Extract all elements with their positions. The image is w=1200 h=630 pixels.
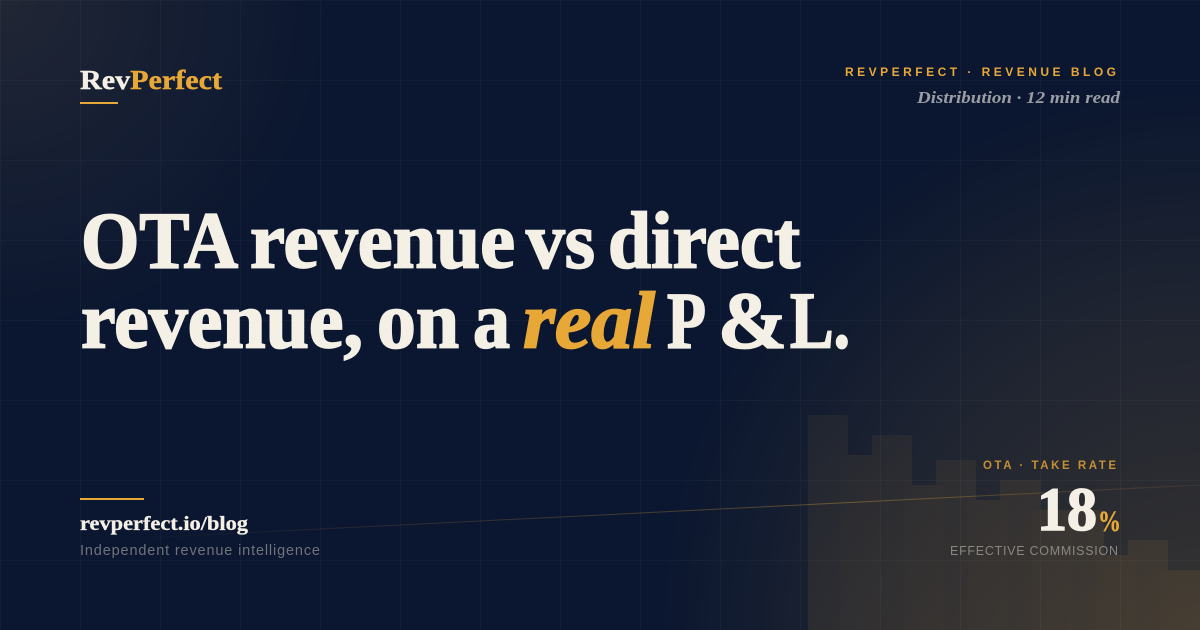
title: P <box>667 278 706 366</box>
stat value: 18 <box>1037 477 1097 544</box>
title: revenue <box>250 198 515 286</box>
stat callout <box>950 460 1121 558</box>
logo wordmark: RevPerfect <box>80 64 223 95</box>
header meta <box>845 65 1121 107</box>
bar chart: decorative revenue bars <box>808 415 1200 630</box>
category and read time: Distribution · 12 min read <box>916 88 1121 107</box>
site url: revperfect.io/blog <box>80 513 248 535</box>
title: & <box>718 278 787 366</box>
title: direct <box>608 198 800 286</box>
title: a <box>473 278 510 366</box>
logo underline <box>80 102 118 104</box>
eyebrow: REVPERFECT · REVENUE BLOG <box>845 65 1116 79</box>
stat percent sign: % <box>1098 505 1121 538</box>
title: real <box>523 278 656 366</box>
title: vs <box>526 198 595 286</box>
footer: site info <box>80 498 320 559</box>
trend line <box>0 485 1200 545</box>
title: on <box>377 278 459 366</box>
title: OTA <box>81 198 238 286</box>
title <box>81 198 850 366</box>
footer rule <box>80 498 144 500</box>
title: L. <box>790 278 850 366</box>
title: revenue, <box>81 278 363 366</box>
stat label: OTA · TAKE RATE <box>983 460 1116 472</box>
tagline: Independent revenue intelligence <box>80 543 320 559</box>
stat caption: EFFECTIVE COMMISSION <box>950 544 1118 558</box>
